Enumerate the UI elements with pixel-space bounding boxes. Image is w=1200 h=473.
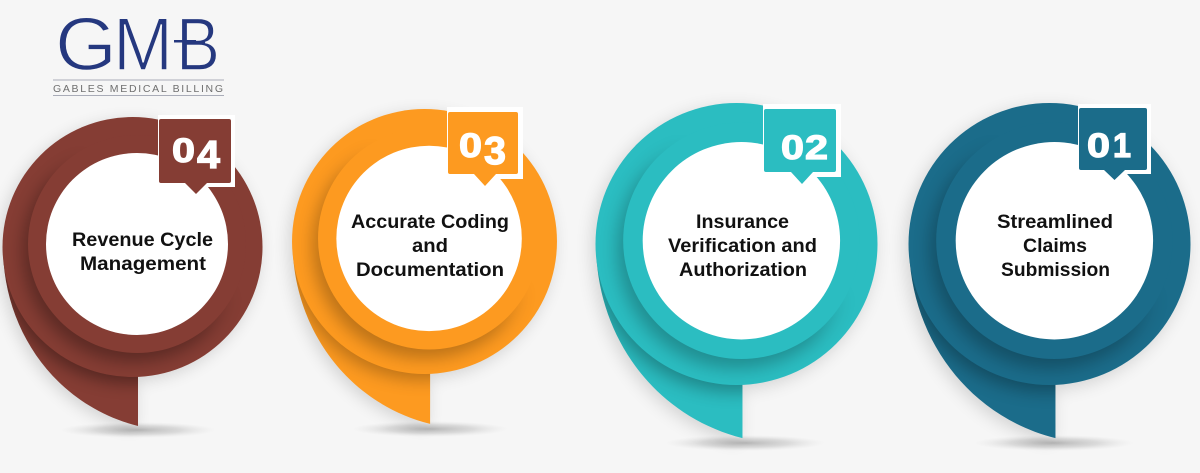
pin shape [0, 117, 262, 430]
step label: Claims [1023, 236, 1087, 257]
step label: Submission [1001, 260, 1110, 281]
step label: Authorization [679, 260, 807, 281]
pin shape [592, 103, 877, 442]
number badge 04: 4 [197, 134, 220, 177]
number badge 02 [763, 104, 841, 184]
logo letters GMB: B [176, 2, 220, 86]
number badge 02: 2 [805, 129, 828, 167]
step label: Streamlined [997, 212, 1113, 233]
step label: Verification and [668, 236, 817, 257]
step label [668, 212, 817, 281]
step label: and [412, 236, 448, 257]
step label: Documentation [356, 260, 504, 281]
panel: step 01 Streamlined Claims Submission [905, 103, 1190, 451]
number badge 04 [158, 115, 235, 194]
step label: Accurate Coding [351, 212, 509, 233]
number badge 02: 0 [781, 129, 804, 167]
number badge 04: 0 [172, 132, 195, 170]
number badge 01: 1 [1113, 127, 1131, 165]
logo tagline: GABLES MEDICAL BILLING [53, 83, 223, 95]
number badge 01: 0 [1087, 127, 1110, 165]
logo letters GMB: M [113, 2, 173, 86]
number badge 01 [1078, 104, 1151, 180]
panel: step 03 Accurate Coding and Documentation [289, 107, 557, 437]
step label: Revenue Cycle [72, 230, 213, 251]
step label [72, 230, 213, 275]
logo: Gables Medical Billing [53, 2, 224, 96]
panel: step 02 Insurance Verification and Authorization [592, 103, 877, 451]
panel: step 04 Revenue Cycle Management [0, 115, 262, 438]
step label: Insurance [696, 212, 789, 233]
pin shape [289, 109, 557, 428]
number badge 03: 3 [484, 130, 506, 173]
logo letters GMB [55, 2, 220, 86]
logo letters GMB: G [55, 2, 117, 86]
pin shape [905, 103, 1190, 442]
step label [351, 212, 509, 281]
step label: Management [80, 254, 207, 275]
number badge 03: 0 [459, 127, 482, 165]
number badge 03 [447, 107, 523, 186]
step label [997, 212, 1113, 281]
